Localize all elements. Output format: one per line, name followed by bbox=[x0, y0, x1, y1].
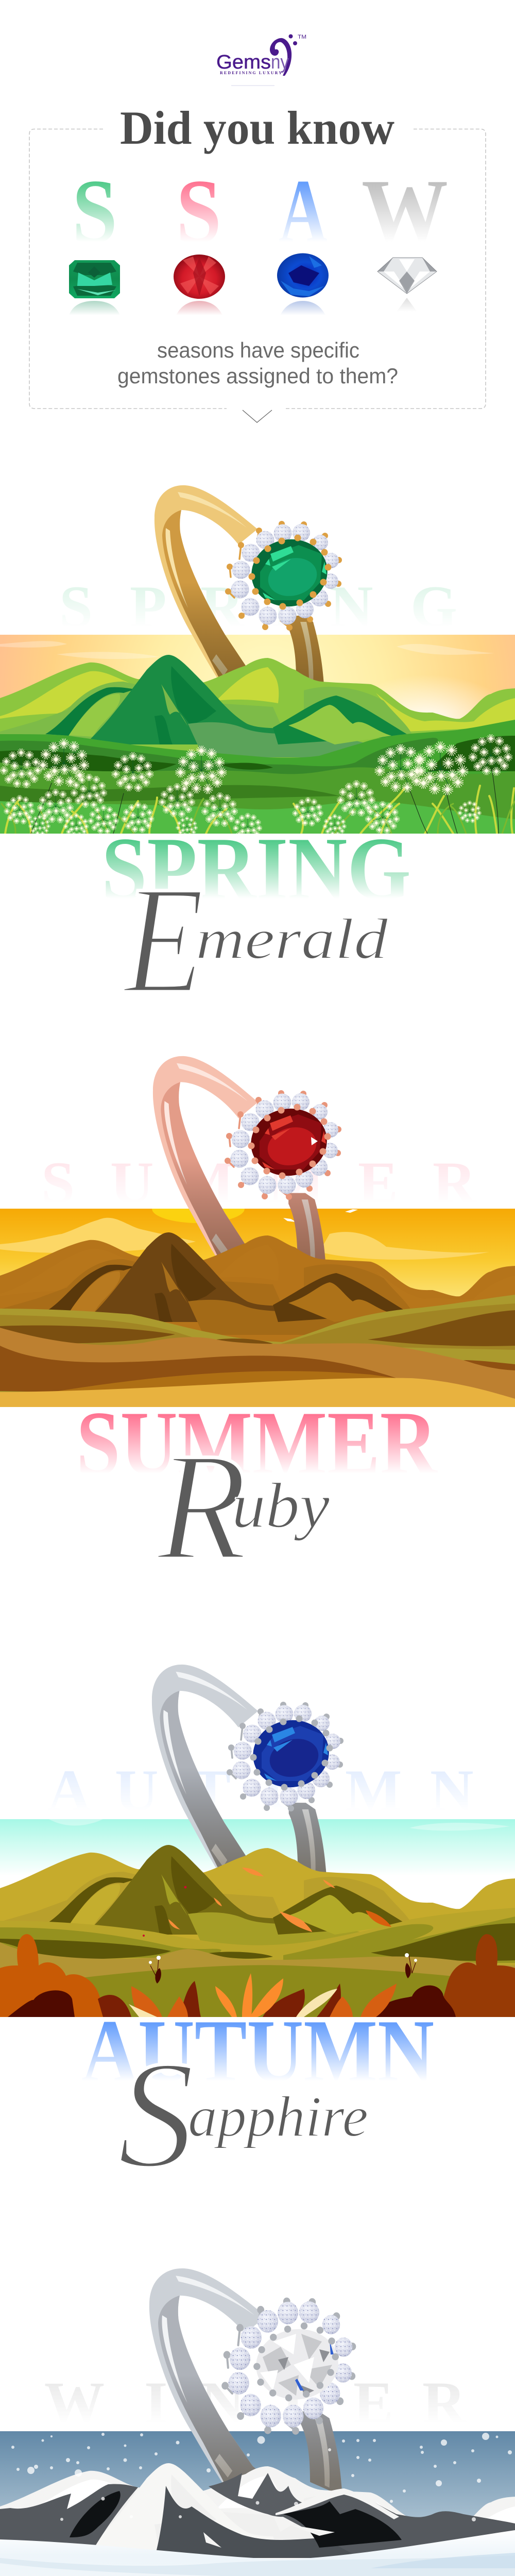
panel: spring bbox=[0, 485, 515, 1025]
gem: ruby bbox=[174, 255, 225, 299]
script uby: uby bbox=[232, 1470, 330, 1541]
autumn foreground bbox=[0, 1908, 515, 2017]
gemstone name emerald bbox=[122, 854, 388, 1025]
script capital R: R bbox=[155, 1421, 247, 1592]
heading autumn: AUTUMN bbox=[81, 2001, 434, 2101]
ring: emerald gold, head bbox=[225, 521, 342, 631]
top logo bbox=[216, 34, 306, 76]
autumn foliage bbox=[0, 1934, 515, 2017]
dashed frame bbox=[29, 129, 486, 409]
arrow chevron bbox=[243, 410, 272, 422]
letter A autumn: A bbox=[279, 160, 328, 262]
ghost word autumn: AUTUMN bbox=[47, 1758, 474, 1824]
gem: emerald bbox=[69, 260, 120, 298]
winter rock detail bbox=[0, 2473, 515, 2558]
logo wordmark Gems: Gems bbox=[216, 52, 271, 73]
gem: diamond bbox=[377, 258, 437, 294]
letter S spring: S bbox=[72, 160, 117, 262]
gemstone name sapphire bbox=[117, 2029, 368, 2200]
summer sky bbox=[0, 1209, 515, 1296]
ring: diamond white gold, head bbox=[221, 2298, 356, 2435]
winter landscape bbox=[0, 2433, 515, 2576]
logo trademark: TM bbox=[298, 34, 306, 40]
panel: summer bbox=[0, 1056, 515, 1592]
spring landscape bbox=[0, 655, 515, 845]
season initials and gems bbox=[69, 160, 448, 315]
gem reflections bbox=[69, 298, 417, 315]
summer foreground bbox=[0, 1295, 515, 1407]
falling leaves bbox=[143, 1868, 391, 1937]
small white flowers bbox=[149, 1953, 417, 1984]
logo swirl bbox=[270, 38, 291, 76]
logo tagline: REDEFINING LUXURY bbox=[220, 71, 282, 75]
winter foreground snow bbox=[0, 2530, 515, 2576]
ghost word winter: WINTER bbox=[44, 2370, 467, 2436]
spring grass bbox=[2, 768, 515, 834]
spring foreground bbox=[0, 720, 515, 835]
ring: diamond white gold, band bbox=[149, 2268, 342, 2496]
intro line 1: seasons have specific bbox=[157, 338, 359, 362]
autumn sky bbox=[0, 1819, 515, 1876]
gemstone name ruby bbox=[155, 1421, 330, 1592]
intro text bbox=[117, 338, 398, 388]
winter sky bbox=[0, 2431, 515, 2552]
ghost word spring: SPRING bbox=[59, 574, 457, 640]
ring: emerald gold, band bbox=[154, 485, 324, 693]
script apphire: apphire bbox=[188, 2085, 368, 2149]
ring: sapphire white gold, head bbox=[227, 1702, 344, 1811]
heading summer: SUMMER bbox=[76, 1392, 438, 1494]
centre diamond bbox=[251, 2324, 343, 2404]
ring: ruby rose, head bbox=[225, 1090, 341, 1200]
heading spring: SPRING bbox=[101, 819, 411, 919]
script capital E: E bbox=[122, 854, 204, 1025]
snowflakes bbox=[11, 2433, 512, 2521]
spring sky bbox=[0, 635, 515, 719]
logo wordmark ny: ny bbox=[271, 52, 289, 73]
panel: winter bbox=[0, 2268, 515, 2576]
logo dots bbox=[288, 34, 297, 45]
gem: sapphire bbox=[277, 253, 329, 298]
intro line 2: gemstones assigned to them? bbox=[117, 364, 398, 388]
summer landscape bbox=[0, 1232, 515, 1422]
title: Did you know bbox=[120, 101, 394, 154]
autumn landscape bbox=[0, 1845, 515, 2035]
script capital S: S bbox=[117, 2029, 195, 2200]
letter S summer: S bbox=[176, 160, 221, 262]
ring: sapphire white gold, band bbox=[152, 1665, 327, 1885]
script merald: merald bbox=[196, 907, 388, 971]
letter W winter: W bbox=[362, 160, 448, 262]
dandelions bbox=[0, 734, 512, 840]
ghost word summer: SUMMER bbox=[41, 1150, 477, 1216]
panel: autumn bbox=[0, 1665, 515, 2200]
ring: ruby rose, band bbox=[153, 1056, 327, 1274]
